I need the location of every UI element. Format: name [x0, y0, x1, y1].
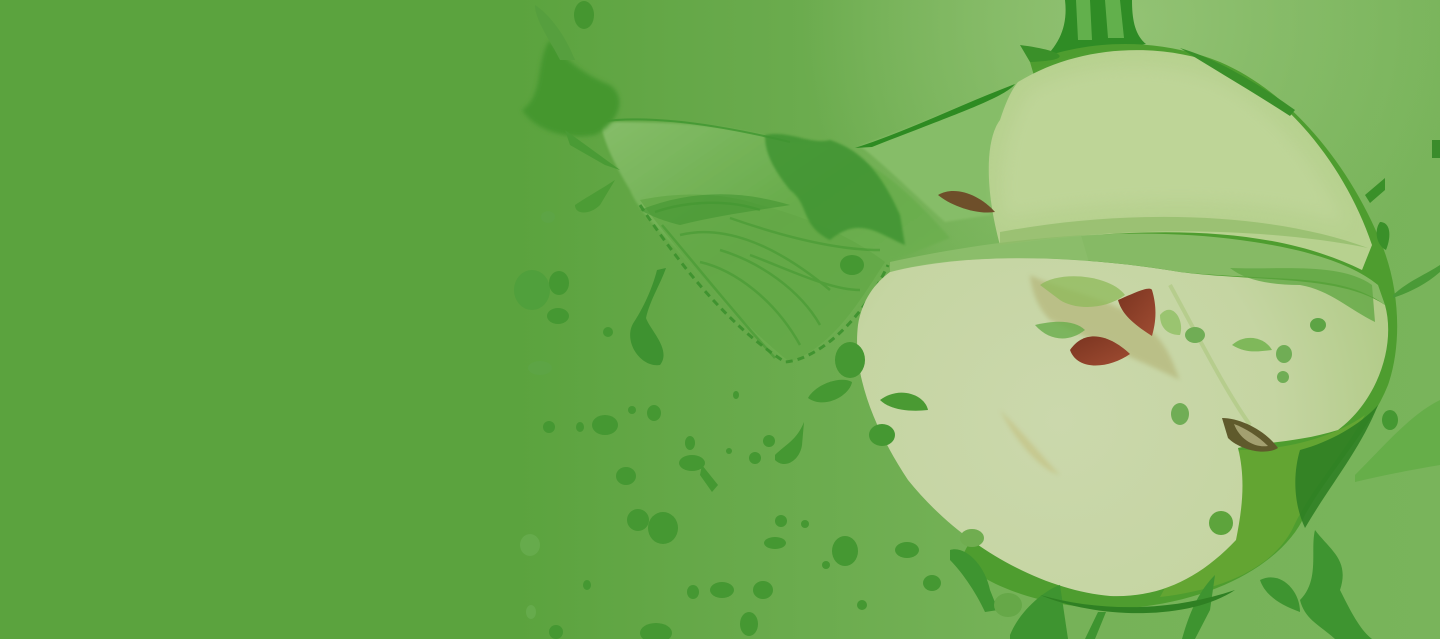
apple upper half — [989, 50, 1372, 270]
apple rim — [960, 44, 1397, 608]
juice on apple surface — [880, 45, 1385, 411]
juice splash sheet — [522, 1, 1015, 365]
droplets — [514, 211, 1398, 639]
juice stream at top — [1040, 0, 1146, 62]
right side splash — [1355, 140, 1440, 482]
apple seeds — [938, 191, 1278, 452]
apple lower half flesh — [857, 258, 1388, 596]
bottom splash — [950, 530, 1372, 639]
